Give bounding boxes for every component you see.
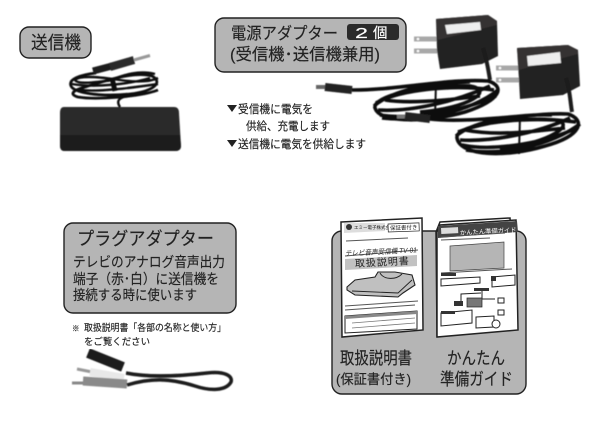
caption: quick guide <box>440 349 513 389</box>
text: footnote <box>72 321 226 348</box>
caption: quick guide: 準備ガイド <box>440 370 513 389</box>
manual: テレビ音声受信機 TV-01 <box>345 246 417 258</box>
badge: power adapter: (受信機･送信機兼用) <box>230 45 380 64</box>
text: footnote: ※ <box>72 324 80 333</box>
caption: quick guide: かんたん <box>447 349 505 368</box>
text: footnote: 取扱説明書「各部の名称と使い方」 <box>84 321 226 334</box>
label: quantity <box>347 24 399 42</box>
panel: documents <box>332 218 526 394</box>
text: adapter notes: 受信機に電気を <box>238 102 313 116</box>
badge: transmitter <box>20 27 91 58</box>
adapter 1 <box>316 15 498 120</box>
caption: manual: 取扱説明書 <box>340 349 412 368</box>
panel: plug adapter: 端子（赤･白）に送信機を <box>73 271 219 287</box>
adapter 2 <box>397 45 580 154</box>
icon: device <box>347 272 415 297</box>
photo: power adapters <box>316 15 580 154</box>
panel: plug adapter <box>64 223 236 313</box>
manual: エミー電子株式会社 <box>354 224 395 231</box>
quick guide: かんたん準備ガイド <box>460 225 517 237</box>
text: adapter notes: 供給、充電します <box>246 119 330 133</box>
caption: manual <box>336 349 412 387</box>
quick guide <box>436 218 518 337</box>
manual: 取扱説明書 <box>354 254 409 270</box>
manual: 保証書付き <box>390 223 418 232</box>
text: adapter notes <box>227 102 366 151</box>
text: adapter notes: 送信機に電気を供給します <box>238 137 366 151</box>
photo: plug adapter cable <box>72 353 231 389</box>
panel: plug adapter: プラグアダプター <box>77 229 214 249</box>
badge: transmitter: 送信機 <box>31 33 81 53</box>
manual <box>341 218 423 337</box>
badge: power adapter: 電源アダプター <box>231 24 338 43</box>
text: footnote: をご覧ください <box>84 335 150 348</box>
panel: plug adapter: テレビのアナログ音声出力 <box>73 254 225 270</box>
label: quantity: 2 <box>355 25 368 42</box>
panel: plug adapter: 接続する時に使います <box>73 287 197 303</box>
caption: manual: (保証書付き) <box>336 372 411 387</box>
label: quantity: 個 <box>373 25 388 42</box>
photo: transmitter with cable <box>60 56 181 151</box>
badge: power adapter <box>215 18 406 72</box>
